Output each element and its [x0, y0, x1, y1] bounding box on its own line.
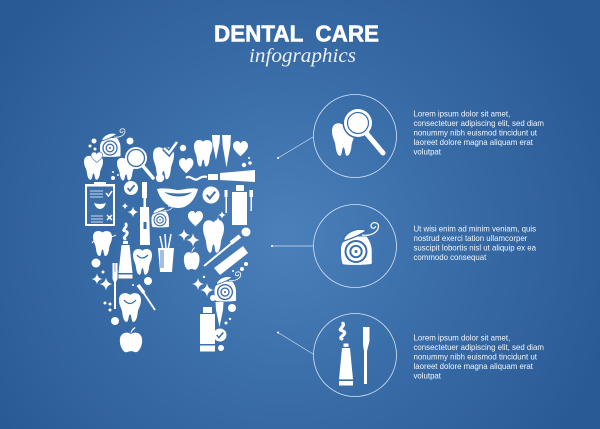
icon: diagonal toothbrush	[204, 243, 232, 266]
icon: flossed tooth	[92, 231, 116, 256]
icon: implant 2	[222, 135, 231, 168]
panel: text 1: Lorem ipsum dolor sit amet,	[414, 110, 510, 118]
icon: smiling tooth	[133, 249, 152, 275]
icon: check circle left	[124, 181, 138, 195]
panel: check-up icon circle	[314, 94, 396, 178]
dots	[88, 138, 252, 351]
icon: diagonal tube	[214, 246, 248, 275]
icon: smiling lips	[157, 188, 198, 208]
icon: vertical toothpaste	[232, 185, 247, 225]
panel: text 3	[414, 334, 544, 380]
panel: text 3: consectetuer adipiscing elit, sed diam	[414, 343, 544, 352]
panel: text 3: volutpat	[414, 372, 442, 380]
icon: lower left brush head	[138, 285, 144, 293]
panel: text 3: Lorem ipsum dolor sit amet,	[414, 334, 510, 342]
icon: apple center	[184, 247, 200, 270]
icon: clipboard	[85, 182, 115, 226]
panel: text 1: laoreet dolore magna aliquam erat	[414, 138, 534, 147]
icon: bottom right toothpaste	[200, 307, 215, 352]
icon: lower left brush	[141, 289, 155, 310]
icon: lower left smiling tooth	[119, 293, 141, 322]
panel: text 1: nonummy nibh euismod tincidunt ut	[414, 128, 538, 138]
icon: right floss	[214, 272, 241, 301]
icon: bottom check circle	[214, 328, 226, 342]
icon: vertical toothbrush	[112, 263, 118, 309]
icon: bottom apple	[120, 327, 142, 352]
icon: center heart	[188, 211, 203, 226]
icon: toothpaste	[339, 323, 353, 386]
sparkles	[92, 202, 226, 297]
tooth-shaped icon collage	[84, 129, 255, 352]
icon: horizontal toothpaste	[186, 170, 255, 182]
icon: tooth with magnifier	[117, 147, 153, 180]
connector 2	[271, 245, 313, 247]
panel: text 1: consectetuer adipiscing elit, sed diam	[414, 119, 544, 128]
connector 3	[277, 332, 313, 354]
title: DENTAL CARE	[214, 20, 379, 46]
icon: bottom implant	[216, 302, 224, 327]
panel: text 2: Ut wisi enim ad minim veniam, quis	[414, 224, 536, 234]
panel: text 1	[414, 110, 544, 156]
icon: tooth with heart	[84, 152, 103, 180]
icon: top right heart	[233, 141, 248, 156]
panel: text 2: suscipit lobortis nisl ut aliquip ex ea	[414, 244, 537, 252]
icon: middle floss	[152, 203, 173, 227]
icon: small toothbrushes	[224, 190, 253, 213]
icon: diagonal brush head	[231, 236, 240, 243]
icon: electric toothbrush	[140, 182, 150, 245]
connector 1	[277, 137, 313, 159]
panel: text 2: nostrud exerci tation ullamcorper	[414, 234, 528, 243]
icon: center check circle	[202, 186, 220, 204]
panel: text 2	[414, 224, 537, 262]
panel: floss icon circle	[314, 204, 396, 288]
icon: implant 1	[212, 135, 220, 160]
subtitle: infographics	[249, 45, 356, 67]
icon: crown tooth	[194, 140, 212, 167]
icon: floss	[341, 223, 378, 265]
panel: text 3: laoreet dolore magna aliquam erat	[414, 362, 534, 371]
panel: toothpaste icon circle	[314, 314, 396, 396]
panel: text 3: nonummy nibh euismod tincidunt ut	[414, 352, 538, 362]
panel: text 1: volutpat	[414, 148, 442, 156]
icon: tooth with check	[153, 142, 177, 179]
icon: left heart	[179, 158, 193, 173]
icon: tooth and magnifier	[332, 108, 383, 156]
icon: toothpaste with swirl	[118, 224, 132, 278]
icon: center tooth	[203, 220, 224, 253]
icon: glass with brushes	[158, 234, 174, 272]
icon: toothbrush	[363, 327, 370, 384]
panel: text 2: commodo consequat	[414, 253, 487, 262]
icon: top floss	[100, 129, 125, 157]
